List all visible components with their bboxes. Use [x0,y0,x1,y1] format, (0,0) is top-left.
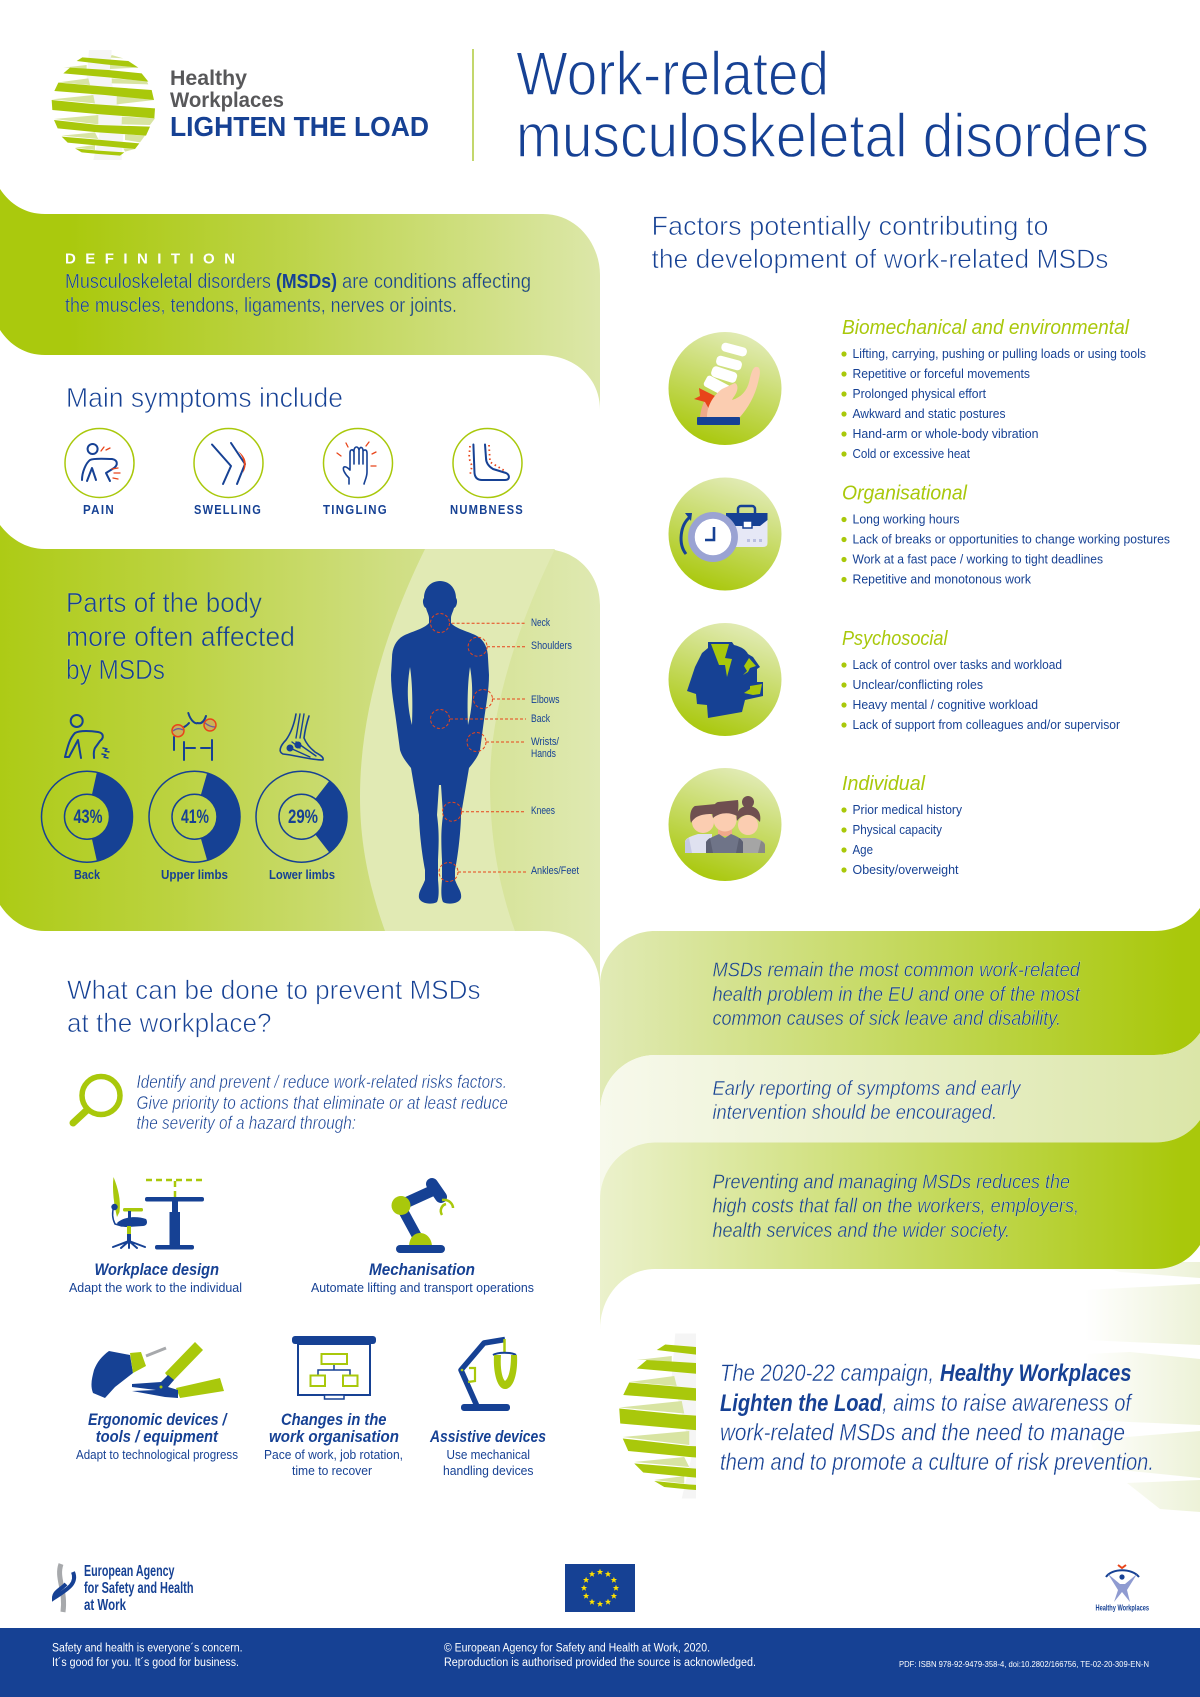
measure: assistive devices: Assistive devices [429,1427,546,1446]
heading: what can be done: What can be done to prevent MSDs [67,975,480,1005]
symptom: pain [65,428,134,517]
icon: lower limbs foot [280,714,323,760]
key message band 3: health services and the wider society. [712,1220,1010,1242]
heading: parts of the body: by MSDs [66,654,165,685]
campaign text: work-related MSDs and the need to manage [720,1420,1125,1446]
donut: upper limbs 41% [149,771,241,882]
factor: individual: Individual [842,772,926,795]
factor: psychosocial: Psychosocial [842,627,949,650]
icon: drill and pliers [91,1342,224,1398]
symptom: swelling [194,428,263,517]
key message band 1 [600,908,1200,1112]
key message band 2: intervention should be encouraged. [712,1102,997,1124]
factor: biomechanical and environmental: Biomechanical and environmental [842,316,1130,339]
body silhouette with affected areas: Back [531,713,550,725]
measure: changes in the work organisation: time to recover [292,1463,373,1478]
measure: mechanisation: Automate lifting and transport operations [311,1280,534,1295]
measure: ergonomic devices: Adapt to technological progress [76,1447,238,1462]
footer bar [0,1628,1200,1697]
footer bar: © European Agency for Safety and Health at Work, 2020. [444,1642,710,1654]
icon: presentation board [292,1336,376,1399]
factor: psychosocial [668,623,1121,736]
measure: workplace design: Workplace design [94,1260,219,1279]
bullet list [841,657,1121,732]
donut: upper limbs 41%: Upper limbs [161,867,228,882]
measure: assistive devices [429,1339,546,1478]
icon: robot arm [392,1184,453,1253]
heading: what can be done: at the workplace? [67,1008,272,1038]
heading: parts of the body: Parts of the body [66,587,262,618]
heading: what can be done [67,975,480,1038]
heading: main symptoms: Main symptoms include [66,382,343,413]
logo: Healthy Workplaces Lighten the Load [52,50,429,160]
measure: changes in the work organisation [264,1336,403,1478]
measure: changes in the work organisation: Pace of work, job rotation, [264,1447,403,1462]
bullet list: Awkward and static postures [852,406,1006,421]
faded stripes bottom right [1085,1262,1200,1512]
body silhouette with affected areas: Elbows [531,694,560,706]
bullet list: Lack of support from colleagues and/or supervisor [852,717,1121,732]
measure: mechanisation: Mechanisation [369,1260,475,1279]
symptom: numbness: NUMBNESS [450,503,524,517]
key message band 2: Early reporting of symptoms and early [712,1078,1021,1100]
heading: parts of the body [66,587,295,685]
donut: lower limbs 29% [256,771,347,882]
donut: lower limbs 29%: Lower limbs [269,867,335,882]
header divider [472,49,474,161]
bullet list [841,512,1170,586]
bullet list: Long working hours [852,512,960,526]
logo: Healthy Workplaces Lighten the Load: Healthy [170,67,247,90]
measure: assistive devices: Use mechanical [446,1447,530,1462]
bullet list: Age [852,842,873,857]
measure: assistive devices: handling devices [443,1463,534,1478]
half campaign logo [619,1334,696,1498]
body silhouette with affected areas: Neck [531,617,550,629]
symptom: swelling: SWELLING [194,503,262,517]
measure: ergonomic devices [76,1342,238,1462]
bullet list: Unclear/conflicting roles [852,677,983,692]
logo: European Agency for Safety and Health at Work: European Agency [84,1563,175,1580]
bullet list: Repetitive or forceful movements [852,366,1030,381]
symptom: tingling: TINGLING [323,503,388,517]
title: Work-related [516,40,829,109]
body silhouette with affected areas: Hands [531,748,556,760]
bullet list: Lifting, carrying, pushing or pulling loads or using tools [852,346,1146,361]
donut: upper limbs 41%: 41% [181,807,209,828]
measure: changes in the work organisation: work organisation [269,1427,399,1446]
donut: back 43% [42,771,133,882]
bullet list: Physical capacity [852,822,942,837]
icon: magnifying glass [73,1076,120,1123]
bullet list: Prolonged physical effort [852,386,986,401]
title [516,40,1149,171]
logo: European Agency for Safety and Health at Work: for Safety and Health [84,1580,194,1597]
body silhouette with affected areas: Shoulders [531,640,572,652]
key message band 3 [600,1120,1200,1330]
key message band 1: health problem in the EU and one of the most [712,984,1081,1006]
bullet list: Work at a fast pace / working to tight deadlines [852,552,1103,566]
panel: definition [0,189,600,410]
campaign text: Lighten the Load [720,1390,883,1417]
factor: organisational [668,478,1170,590]
bullet list: Obesity/overweight [852,862,959,877]
footer bar: It´s good for you. It´s good for business. [52,1657,239,1669]
panel: definition: Musculoskeletal disorders [65,271,271,293]
icon: three people [685,796,765,853]
icon: upper limbs [172,713,216,760]
campaign text: The 2020-22 campaign, [720,1360,934,1387]
campaign text: , aims to raise awareness of [882,1390,1133,1417]
icon: patient lift [461,1339,517,1411]
panel: definition: are conditions affecting [342,271,531,293]
factor: organisational: Organisational [842,482,968,504]
footer bar: Safety and health is everyone´s concern. [52,1642,242,1654]
logo: European Agency for Safety and Health at Work: at Work [84,1597,126,1614]
measure: workplace design: Adapt the work to the individual [69,1280,242,1295]
footer bar: Reproduction is authorised provided the source is acknowledged. [444,1657,756,1669]
icon: desk and chair [111,1177,204,1250]
bullet list: Prior medical history [852,802,962,817]
campaign text [720,1360,1154,1476]
icon: back pain [65,715,109,758]
logo: Healthy Workplaces figure: Healthy Workplaces [1096,1604,1149,1612]
logo: Healthy Workplaces Lighten the Load: LIGHTEN THE LOAD [170,111,429,142]
logo: Healthy Workplaces Lighten the Load: Workplaces [170,89,284,112]
factor: individual [668,768,962,881]
prevention intro text [136,1072,508,1133]
measure: changes in the work organisation: Changes in the [281,1410,386,1429]
body silhouette with affected areas [391,581,579,904]
bullet list: Cold or excessive heat [852,446,970,461]
body silhouette with affected areas: Ankles/Feet [531,865,579,877]
icon: clock and briefcase [681,506,768,559]
measure: workplace design [69,1177,242,1295]
heading: factors [652,211,1108,274]
panel: definition: (MSDs) [276,271,337,293]
donut: lower limbs 29%: 29% [288,807,318,828]
bullet list: Lack of control over tasks and workload [852,657,1062,672]
heading: parts of the body: more often affected [66,621,295,652]
key message band 2 [600,1033,1200,1200]
logo: Healthy Workplaces figure [1096,1565,1149,1612]
heading: factors: the development of work-related MSDs [652,244,1108,274]
panel: parts of the body [0,525,600,988]
donut: back 43%: Back [74,867,101,882]
factor: biomechanical and environmental [668,316,1146,461]
bullet list: Lack of breaks or opportunities to change working postures [852,532,1170,546]
key message band 3: high costs that fall on the workers, employers, [712,1196,1079,1218]
bullet list [841,802,962,877]
bullet list: Repetitive and monotonous work [852,572,1031,586]
campaign text: Healthy Workplaces [940,1360,1132,1387]
prevention intro text: the severity of a hazard through: [136,1113,356,1133]
logo: EU flag [565,1564,635,1612]
footer bar: PDF: ISBN 978-92-9479-358-4, doi:10.2802/166756, TE-02-20-309-EN-N [899,1659,1149,1669]
symptom: pain: PAIN [83,503,115,517]
key message band 1: MSDs remain the most common work-related [712,959,1081,981]
body silhouette with affected areas: Knees [531,805,555,817]
panel: definition: the muscles, tendons, ligaments, nerves or joints. [65,295,457,317]
key message band 1: common causes of sick leave and disability. [712,1008,1061,1030]
prevention intro text: Give priority to actions that eliminate or at least reduce [136,1093,508,1113]
body silhouette with affected areas: Wrists/ [531,736,560,748]
heading: factors: Factors potentially contributing to [652,211,1048,241]
prevention intro text: Identify and prevent / reduce work-related risks factors. [136,1072,507,1092]
measure: mechanisation [311,1184,534,1295]
icon: head with lightning [687,642,763,718]
symptom: numbness [450,428,524,517]
key message band 3: Preventing and managing MSDs reduces the [712,1171,1070,1193]
bullet list: Heavy mental / cognitive workload [852,697,1038,712]
measure: ergonomic devices: Ergonomic devices / [88,1410,228,1429]
symptom: tingling [323,428,392,517]
bullet list: Hand-arm or whole-body vibration [852,426,1038,441]
bullet list [841,346,1146,461]
donut: back 43%: 43% [74,807,103,828]
icon: hand lifting spine [694,342,760,425]
logo: European Agency for Safety and Health at Work [54,1563,194,1614]
measure: ergonomic devices: tools / equipment [96,1427,219,1446]
panel: definition: DEFINITION [65,250,235,268]
